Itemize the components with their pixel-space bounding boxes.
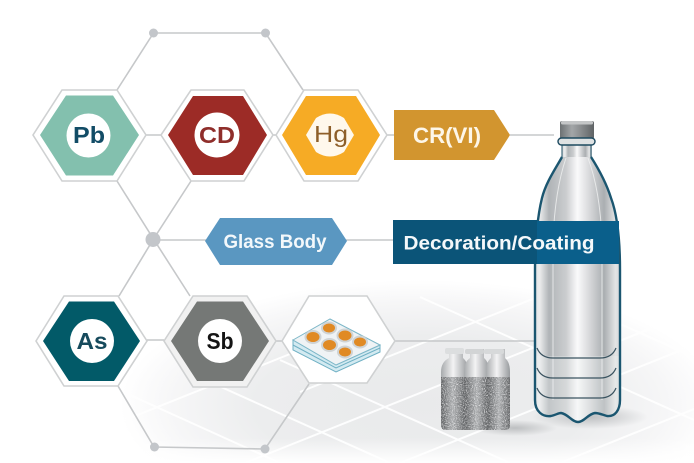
- bottle ribs: [537, 348, 616, 398]
- label: CR(VI): [394, 110, 510, 160]
- hexagon: Hg: Hg: [314, 121, 348, 147]
- hexagon: CD: [161, 90, 273, 181]
- hexagon: As: As: [76, 328, 108, 354]
- label: CR(VI): CR(VI): [413, 123, 481, 148]
- floor background: [0, 270, 694, 463]
- hexagon: Pb: Pb: [73, 122, 105, 148]
- hexagon network lines: [117, 33, 554, 449]
- bottle and vial shadows: [473, 405, 648, 436]
- label: Decoration/Coating band: Decoration/Coating: [404, 234, 594, 254]
- label: Glass Body: Glass Body: [224, 232, 327, 253]
- main bottle: [530, 121, 625, 426]
- hexagon: Sb: [164, 296, 276, 387]
- icon: tray with six wells: [293, 319, 380, 372]
- hexagon: Hg: [276, 90, 387, 181]
- network nodes: [146, 28, 270, 454]
- label: Decoration/Coating band: [393, 220, 619, 264]
- hexagon: As: [36, 296, 147, 386]
- label: Glass Body: [205, 218, 347, 265]
- hexagon: Pb: [33, 90, 146, 181]
- small vials group: [441, 348, 510, 430]
- hexagon: Sb: Sb: [206, 328, 234, 354]
- hexagon: sample tray icon: [282, 296, 395, 383]
- hexagon: CD: CD: [199, 122, 235, 148]
